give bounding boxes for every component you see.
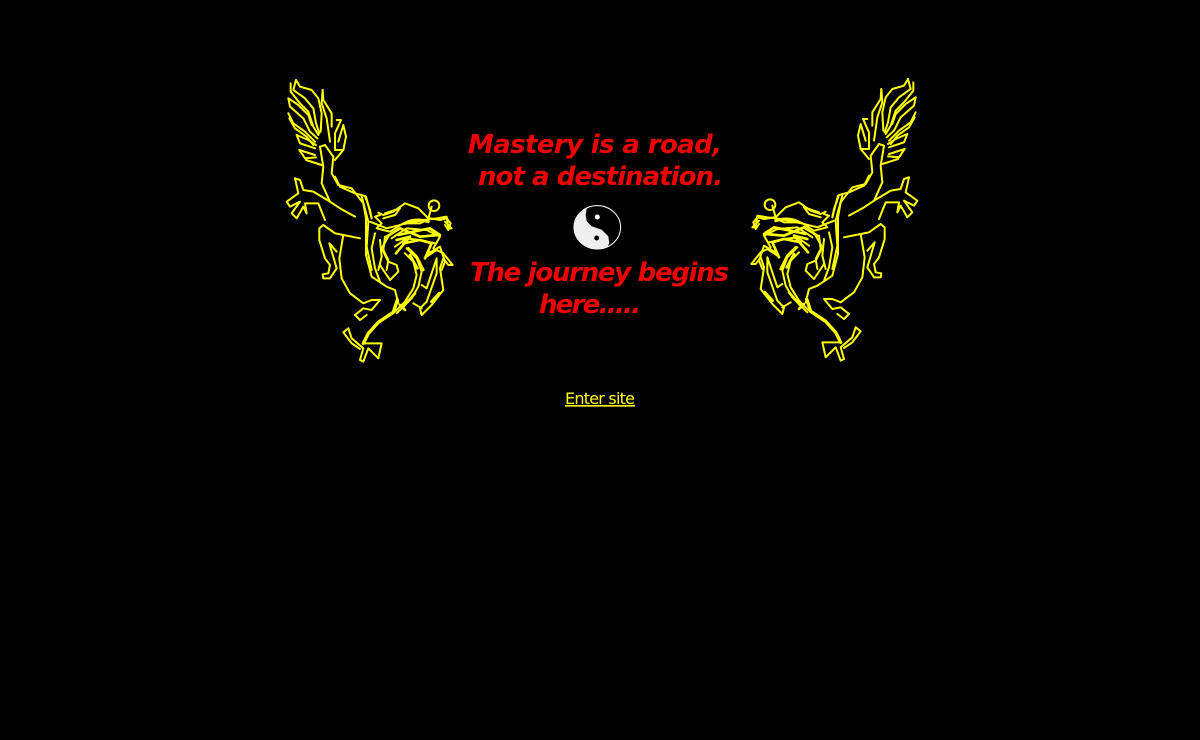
icon: yin yang [574,206,621,249]
heading: mastery line two: not a destination. [478,162,723,192]
heading: journey line two: here..... [539,290,641,320]
heading: mastery line one: Mastery is a road, [468,130,722,160]
heading: journey line one: The journey begins [470,258,729,288]
link: enter site: Enter site [565,389,635,408]
icon: left dragon [287,80,453,362]
icon: right dragon [751,79,917,361]
